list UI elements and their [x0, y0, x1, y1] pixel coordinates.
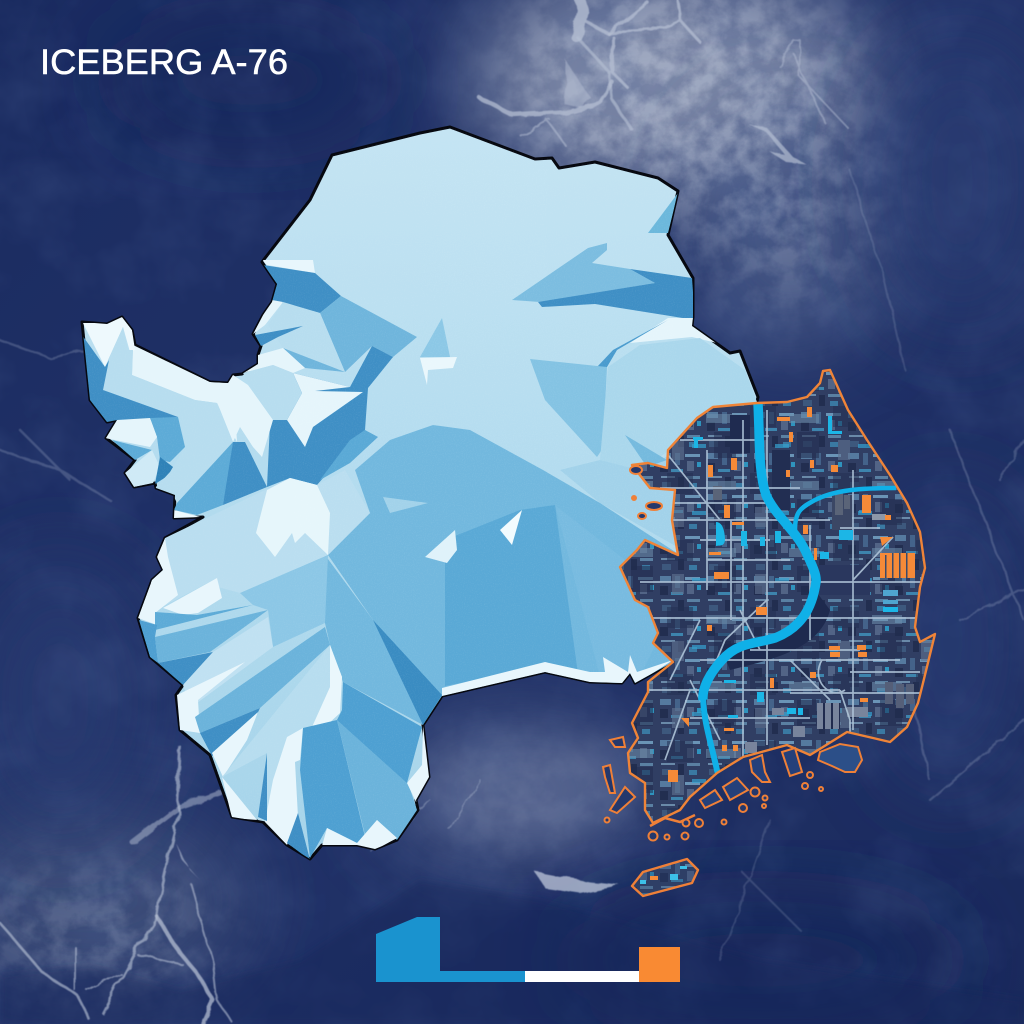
iceberg lower-left lobe facets	[138, 470, 442, 860]
scale bar: orange segment	[639, 947, 680, 982]
city coastline	[620, 370, 935, 823]
title: ICEBERG A-76	[40, 43, 288, 82]
scale bar: white segment	[525, 971, 639, 982]
river	[703, 404, 896, 775]
roads	[640, 410, 925, 760]
grey industrial blocks	[713, 486, 914, 753]
background: pale ice slabs	[176, 57, 807, 893]
iceberg speckle texture	[80, 120, 760, 860]
scale bar	[376, 917, 680, 982]
Jeju island	[628, 855, 703, 900]
cyan buildings	[693, 416, 898, 718]
iceberg left arm facets	[82, 317, 363, 519]
scale bar: iceberg segment	[376, 917, 525, 982]
orange buildings	[668, 407, 915, 782]
city map overlay: South Korea scale comparison	[603, 365, 940, 900]
iceberg upper facets	[253, 193, 760, 560]
city base with block texture	[615, 365, 940, 830]
iceberg lower central facets	[325, 425, 680, 725]
coastal islands	[603, 466, 862, 840]
background: dark lower shelf	[0, 880, 1024, 1024]
iceberg A-76 silhouette	[80, 120, 760, 860]
